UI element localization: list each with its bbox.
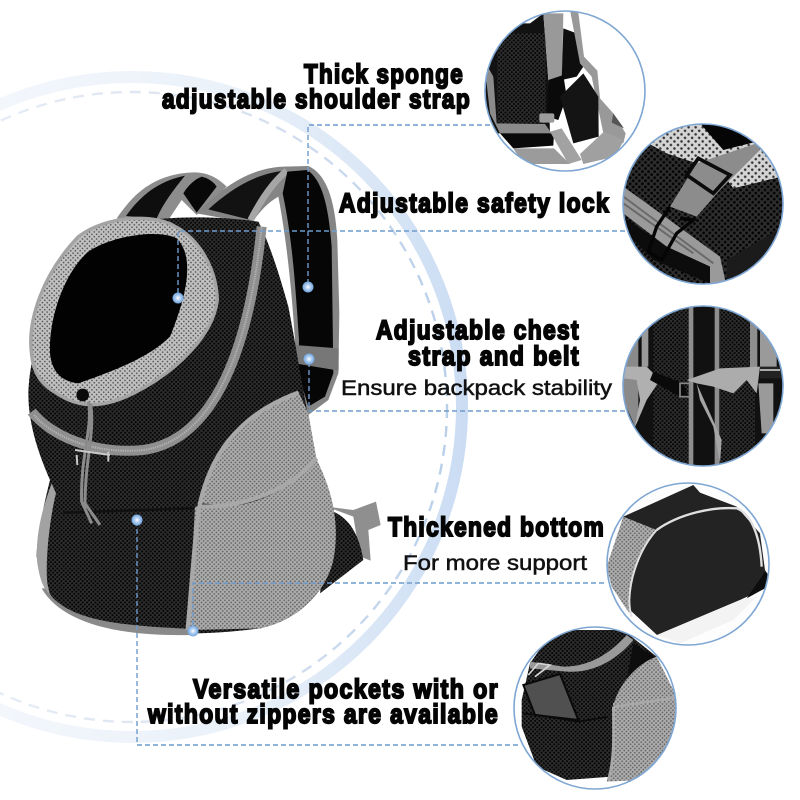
main body <box>28 217 336 634</box>
heading: shoulder strap: adjustable shoulder strap <box>162 84 471 114</box>
upper side mesh panel <box>200 392 317 505</box>
leader line: chest strap <box>309 359 625 411</box>
waist strap and side wing <box>327 502 381 561</box>
heading: chest strap: Adjustable chest <box>376 315 580 345</box>
detail circle: shoulder strap <box>484 10 646 172</box>
collar opening <box>50 234 187 383</box>
backpack illustration <box>28 166 381 635</box>
heading: shoulder strap: Thick sponge <box>304 59 464 89</box>
hook <box>652 206 698 248</box>
far shoulder strap <box>117 172 227 220</box>
background ring <box>0 77 462 737</box>
heading: chest strap <box>376 315 580 371</box>
leader line: shoulder strap <box>308 125 490 287</box>
strap <box>670 143 760 217</box>
near shoulder strap <box>197 166 339 415</box>
mesh collar <box>31 218 217 405</box>
leader line: bottom <box>193 583 604 631</box>
heading: bottom: Thickened bottom <box>388 512 605 542</box>
drawcord and toggle <box>76 389 100 525</box>
bottom hem <box>42 588 190 635</box>
detail circle: pockets <box>513 623 680 793</box>
detail circle: chest strap <box>620 303 787 470</box>
leader line: safety lock <box>178 231 625 298</box>
lower left grey edge <box>37 483 56 595</box>
marker dots <box>132 282 314 636</box>
zipper band <box>32 227 262 451</box>
heading: pockets <box>147 674 499 729</box>
text: stability: Ensure backpack stability <box>341 377 613 400</box>
zipper pull <box>75 450 110 465</box>
chest strap band <box>295 345 339 371</box>
text: support: For more support <box>403 552 587 575</box>
heading: shoulder strap <box>162 59 471 114</box>
detail circle: safety lock <box>620 120 787 287</box>
lower side pocket <box>190 460 336 630</box>
pocket and panel trims <box>188 393 317 630</box>
heading: pockets: without zippers are available <box>147 699 499 729</box>
heading: pockets: Versatile pockets with or <box>193 674 499 704</box>
phone <box>523 674 578 720</box>
leader line: pockets <box>137 520 518 745</box>
detail circle: thickened bottom <box>603 477 777 647</box>
heading: chest strap: strap and belt <box>408 341 580 371</box>
heading: safety lock: Adjustable safety lock <box>339 188 610 218</box>
